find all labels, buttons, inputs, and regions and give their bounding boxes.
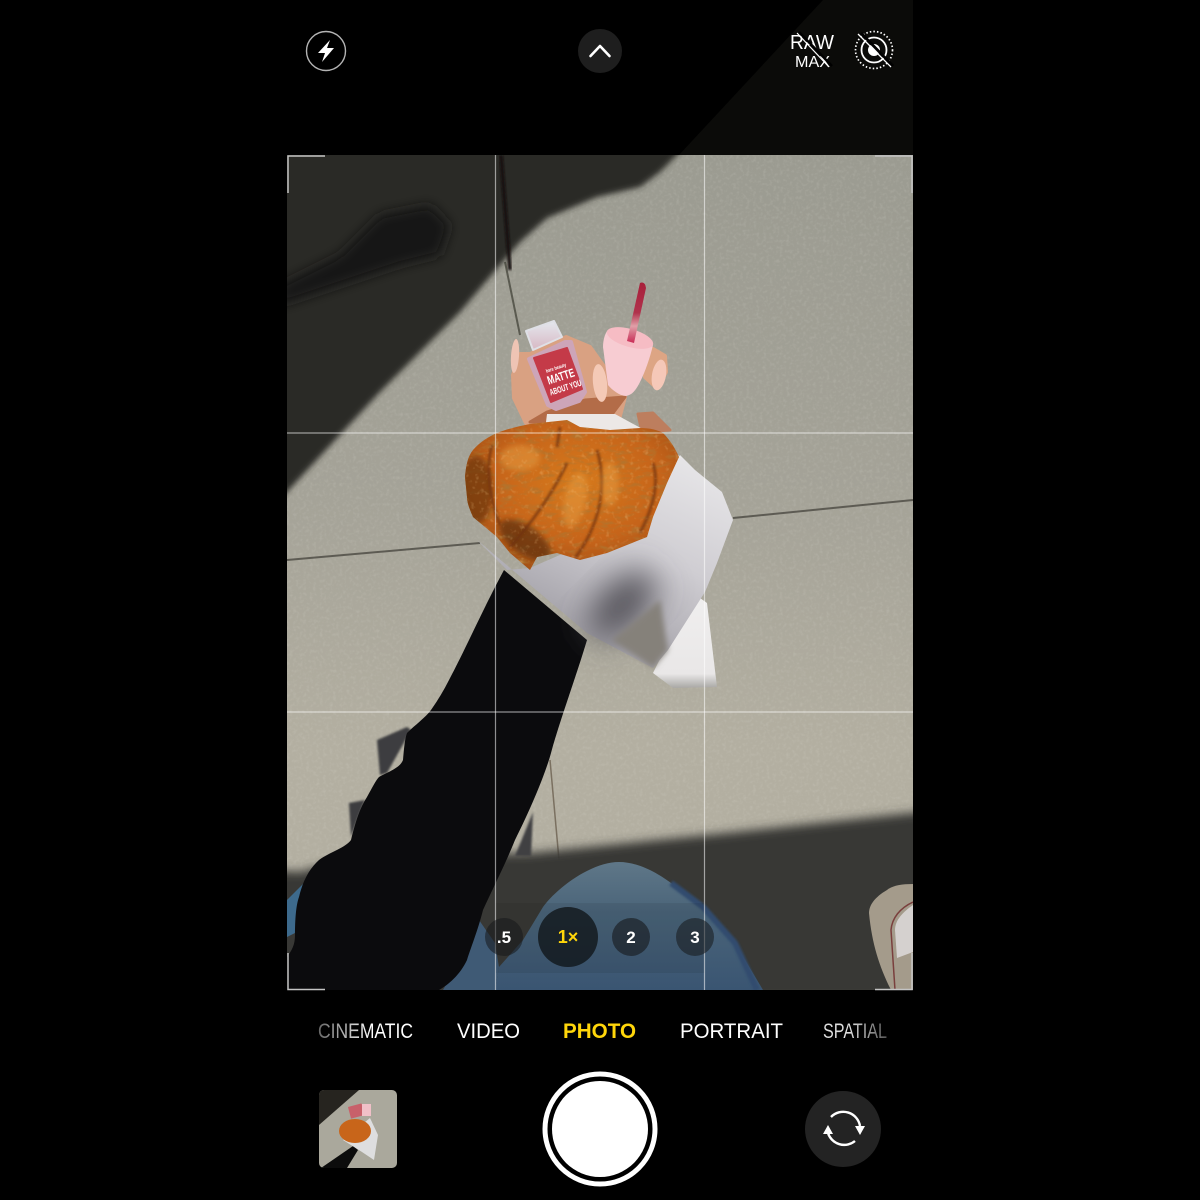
photo: viewfinder [270, 140, 930, 1000]
croissant ridges [489, 427, 656, 558]
icon: raw max off: MAX [795, 54, 830, 71]
bottle red fill [534, 348, 582, 402]
bottle label: bare beauty [545, 362, 567, 375]
stain in shadow [280, 205, 450, 305]
lip tint and hand [510, 283, 670, 432]
shutter button [545, 1074, 655, 1184]
croissant body [459, 415, 685, 575]
mode selector [318, 1020, 887, 1043]
top bar shadow tint [679, 0, 913, 155]
bag flap [653, 593, 717, 688]
croissant flakes [460, 415, 685, 575]
icon: raw max off: RAW [790, 31, 835, 54]
croissant dark left [459, 456, 493, 524]
icon: flash [306, 32, 346, 70]
zoom 3: 3 [690, 928, 700, 947]
shoe toe [895, 905, 913, 958]
thumbnail [319, 1090, 397, 1168]
zoom 2 [612, 918, 650, 956]
nail: ring [652, 360, 666, 390]
bag lower shade [612, 600, 668, 668]
flip camera button [805, 1091, 881, 1167]
zoom .5 [485, 918, 523, 956]
arm shadow right [515, 812, 533, 856]
ground grain [288, 156, 912, 808]
cap [603, 330, 653, 396]
croissant base [460, 415, 685, 575]
icon: raw max off [790, 31, 835, 71]
ring finger [642, 349, 666, 388]
thumbnail cap [362, 1104, 371, 1116]
croissant dark bottom [492, 511, 558, 569]
frame corners [288, 156, 912, 990]
camera interface [287, 0, 913, 1186]
thumbnail arm [321, 1146, 358, 1168]
bag body [477, 455, 733, 668]
icon: chevron button [578, 29, 622, 73]
croissant shine [460, 415, 685, 575]
hand lower shadow [530, 397, 625, 422]
bottle label: ABOUT YOU [548, 378, 583, 397]
jeans: knee [495, 862, 763, 990]
thumbnail bag [343, 1118, 378, 1160]
croissant [459, 415, 685, 575]
zoom band [495, 903, 705, 973]
arm shadow on ground [377, 727, 411, 775]
mode: portrait: PORTRAIT [680, 1020, 783, 1043]
thumbnail shadow [319, 1090, 359, 1125]
bag shading [577, 560, 667, 650]
grid lines [287, 155, 913, 990]
bottle neck [526, 321, 562, 350]
jeans: left [287, 884, 303, 937]
zoom .5: .5 [497, 928, 511, 947]
bottle label [546, 364, 582, 396]
arm shadow lower [349, 800, 365, 837]
shoe [869, 884, 913, 990]
zoom 1x [538, 907, 598, 967]
paper bag [459, 414, 733, 688]
crack in shadow [501, 155, 510, 270]
hand palm and thumb [513, 337, 625, 423]
bottle body [529, 342, 585, 409]
sidewalk cracks [287, 262, 913, 860]
shadow: top left [287, 155, 682, 498]
mode: spatial: SPATIAL [823, 1020, 887, 1043]
bottle label: MATTE [545, 366, 576, 387]
mode: photo: PHOTO [563, 1020, 636, 1043]
zoom controls [485, 907, 714, 967]
lower finger [638, 413, 670, 432]
shoe stripe [891, 902, 913, 990]
zoom 3 [676, 918, 714, 956]
nail: thumb [510, 339, 520, 373]
bag top [545, 414, 682, 470]
nail: middle [592, 364, 608, 402]
jeans: inner [443, 920, 499, 990]
croissant highlights [500, 445, 619, 530]
icon: live photo off [856, 32, 893, 68]
sidewalk [287, 155, 913, 880]
jeans seam [671, 883, 757, 990]
zoom 2: 2 [626, 928, 636, 947]
thumbnail croissant [339, 1119, 371, 1143]
arm sleeve [287, 570, 587, 990]
shadow: bottom [270, 811, 930, 1000]
mode: video: VIDEO [457, 1020, 520, 1043]
wand [627, 283, 646, 343]
zoom 1x: 1× [558, 927, 578, 947]
mode: cinematic: CINEMATIC [318, 1020, 413, 1043]
cap top [607, 327, 654, 349]
thumbnail tint [348, 1103, 365, 1119]
thumbnail ground [319, 1090, 397, 1168]
